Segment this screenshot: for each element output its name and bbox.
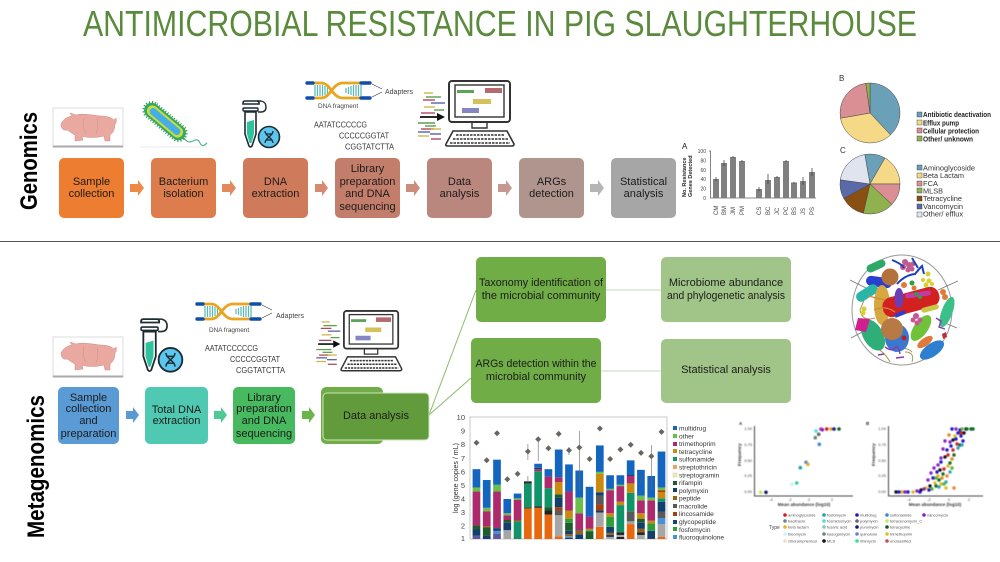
bar chart: resistance genes detected [682,142,816,215]
legend C: Tetracycline [923,194,962,203]
arrow [222,180,236,196]
scatter legend: quinolone [860,532,878,536]
step: bacterium isolation [151,158,216,218]
bar chart: resistance genes detected: PC [784,206,790,215]
box: microbiome abundance [661,257,791,322]
arrow [130,180,144,196]
icon: computer with reads [418,81,514,146]
step: data analysis [321,387,429,444]
legend: peptide [679,496,701,503]
legend [673,426,724,542]
step: library preparation: and DNA [242,415,287,427]
legend: tetracycline [679,449,713,456]
scatter chart A: -2 [788,497,793,502]
bar chart: resistance genes detected: JC [775,207,781,215]
legend C: MLSB [923,186,943,196]
legend: other [679,433,695,440]
step: ARGs detection: ARGs [537,176,567,188]
scatter legend: unclassified [890,538,911,544]
step: library preparation: and DNA [345,188,390,200]
scatter chart A: 0.50 [744,458,753,463]
step: total DNA extraction [145,387,208,444]
scatter chart B: B [866,421,870,426]
scatter chart A: 2 [831,497,834,502]
step: sample collection: collection [69,188,114,200]
scatter chart A: 0 [808,497,811,502]
box: taxonomy identification: the microbial community [482,290,601,302]
scatter legend: MLS [827,538,836,544]
legend B: Other/ unknown [923,134,973,144]
legend C: Other/ efflux [923,210,963,218]
panel: genomics [16,74,991,218]
connector lines [429,290,476,415]
scatter legend [769,512,948,544]
legend: multidrug [679,426,706,432]
scatter legend: multidrug [860,512,876,518]
bar chart: resistance genes detected: 60 [700,168,706,174]
bar chart: resistance genes detected: BM [722,206,728,215]
scatter chart B: 2 [968,497,971,502]
bar chart: resistance genes detected: PS [810,207,816,215]
scatter chart A: Mean abundance (log10) [778,502,831,507]
pie chart B: B [839,74,844,83]
scatter legend: kasugamycin [827,532,850,536]
step: library preparation: Library [247,392,281,404]
legend B [917,110,991,144]
scatter chart B: 0.25 [878,473,887,478]
y axis: 6 [461,468,465,476]
legend: glycopeptide [679,519,716,526]
legend C: Beta Lactam [923,171,964,180]
scatter chart B: 0 [948,497,951,502]
icon: pig card [53,337,123,377]
legend: streptogramin [679,472,720,479]
bars [473,445,665,539]
bar chart: resistance genes detected: JM [731,207,737,215]
scatter legend: aminoglycoside [788,512,816,518]
y axis: 10 [457,413,465,422]
icon: DNA fragment: Adapters [385,89,414,96]
sequence reads text: CCCCCGGTAT [339,132,389,140]
sequence reads text: AATATCCCCCG [314,120,367,130]
legend: polymyxin [679,488,709,495]
icon: computer with reads [316,311,402,371]
step: library preparation [233,387,295,444]
icon: DNA fragment: Adapters [276,313,305,320]
divider [0,240,1000,242]
y axis: 7 [461,454,465,463]
sequence reads text: AATATCCCCCG [205,344,258,353]
bar chart: resistance genes detected: 80 [700,158,706,164]
bar chart: resistance genes detected: 100 [698,149,706,155]
step: data analysis: analysis [440,188,480,200]
legend C: Aminoglycoside [923,164,975,172]
box: statistical analysis [661,339,791,403]
bar chart: resistance genes detected: 20 [700,186,706,192]
step: sample collection and preparation [58,387,119,444]
step: sample collection: Sample [73,176,110,188]
bar chart: resistance genes detected: BS [792,207,798,215]
box: taxonomy identification [476,257,606,322]
step: sample collection and preparation: collection [66,403,111,415]
y axis: 8 [461,440,465,449]
step: library preparation [335,158,400,218]
step: data analysis: Data [448,176,472,188]
legend C [917,164,975,218]
arrow [302,407,315,423]
legend: sulfonamide [679,457,715,464]
bar chart: resistance genes detected: 40 [700,177,706,183]
bar chart: resistance genes detected: 0 [703,196,706,202]
scatter chart A: 1.00 [744,426,753,431]
bar chart: resistance genes detected: BC [766,206,772,215]
scatter chart B: -2 [927,497,932,502]
step: sample collection and preparation: Sample [70,392,107,404]
scatter chart B: 1.00 [878,426,887,431]
step: sample collection and preparation: and [79,415,98,427]
scatter chart A: Frequency [737,443,742,466]
step: bacterium isolation: Bacterium [159,176,208,188]
scatter legend: vancomycin [927,512,948,518]
diamonds and error bars [474,426,664,490]
step: data analysis [427,158,492,218]
step: ARGs detection: detection [529,188,574,200]
arrow [315,180,328,196]
step: total DNA extraction: Total DNA [152,404,202,416]
stacked bar chart: log (gene copies / mL) [451,443,460,513]
connector [606,289,661,291]
scatter chart B: Frequency [871,443,876,466]
scatter chart A: A [739,421,743,426]
y axis: 2 [461,522,465,530]
step: bacterium isolation: isolation [163,188,204,200]
scatter legend: bacitracin [788,518,805,524]
sequence reads text: CCCCCGGTAT [230,355,280,364]
step: DNA extraction: DNA [264,176,288,188]
sequence reads text: CGGTATCTTA [236,366,286,375]
step: library preparation: Library [351,163,385,175]
scatter legend: trimethoprim [890,532,913,536]
arrow [406,180,420,196]
scatter chart A [737,421,853,507]
step: statistical analysis: Statistical [620,176,667,188]
scatter chart A: -4 [769,497,774,502]
arrow [590,180,604,196]
y axis [457,413,465,543]
scatter legend: beta lactam [788,524,809,530]
scatter chart B: 0.75 [878,442,887,447]
box: ARGs detection: microbial community [486,371,587,383]
scatter legend: Type [769,525,780,531]
scatter chart B: 0.50 [878,458,887,463]
legend: streptothricin [679,464,717,472]
scatter chart A: 0.75 [744,442,753,447]
sequence reads text [205,344,286,375]
legend: fluoroquinolone [679,535,724,542]
y axis: 9 [461,426,465,436]
stacked bar chart [451,413,724,543]
heading: Genomics: Genomics [16,112,43,210]
bar chart: resistance genes detected: CS [757,207,763,215]
bar chart: resistance genes detected: CM [714,206,720,215]
legend: trimethoprim [679,441,716,448]
scatter legend: puromycin [860,524,878,530]
legend B: Antibiotic deactivation [923,110,991,119]
icon: bacterium [140,100,207,147]
step: statistical analysis [611,158,676,218]
legend: fosfomycin [679,527,711,534]
step: total DNA extraction: extraction [153,415,200,427]
bar chart: resistance genes detected: A [682,142,688,151]
panel: metagenomics [23,255,983,544]
icon: DNA tube [141,319,182,372]
step: sample collection and preparation: preparation [61,428,116,440]
step: library preparation: sequencing [339,201,396,213]
heading: Metagenomics: Metagenomics [23,395,50,538]
scatter chart B: 0.00 [878,489,887,494]
arrow [214,407,227,423]
scatter legend: chloramphenicol [788,538,817,544]
legend: rifampin [679,480,703,487]
legend: macrolide [679,503,708,510]
scatter legend: rifamycin [860,538,876,544]
legend C: Vancomycin [923,202,963,211]
arrow [126,407,139,423]
y axis: 1 [461,534,465,543]
box: statistical analysis: Statistical analysis [681,364,771,376]
bar chart: resistance genes detected: JS [801,208,807,215]
box: taxonomy identification: Taxonomy identification of [479,277,604,289]
step: library preparation: sequencing [236,428,292,440]
icon: pig card [53,108,123,147]
arrow [498,180,512,196]
icon: DNA fragment [197,304,305,334]
pie chart C: C [840,146,846,155]
step: sample collection [59,158,124,218]
legend C: FCA [923,179,938,188]
icon: DNA fragment [307,83,414,110]
box: ARGs detection: ARGs detection within the [476,358,596,370]
scatter chart A: 0.25 [744,473,753,478]
box: microbiome abundance: Microbiome abundance [669,277,783,289]
legend B: Efflux pump [923,118,959,128]
connector [601,370,661,372]
box: microbiome abundance: and phylogenetic analysis [667,290,785,302]
scatter chart B [866,421,983,507]
box: ARGs detection [471,338,601,403]
scatter chart B: Mean abundance (log10) [909,502,962,507]
step: ARGs detection [519,158,584,218]
scatter chart A: 0.00 [744,489,753,494]
bar chart: resistance genes detected: Genes Detected [688,155,694,197]
scatter chart B: -4 [907,497,912,502]
sequence reads text [314,120,395,152]
scatter legend: fusaric acid [827,524,847,530]
step: data analysis: Data analysis [343,410,410,422]
legend: lincosamide [679,511,714,518]
step: statistical analysis: analysis [624,188,664,200]
scatter legend: tetracycline [890,524,911,530]
y axis: 4 [461,494,465,504]
pie chart C [840,146,900,214]
pie chart B [839,74,900,143]
y axis: 3 [461,508,465,517]
scatter legend: tetracenomycin_C [890,518,922,524]
scatter legend: fosfomycin [827,512,846,518]
scatter legend: polymyxin [860,518,878,524]
bar chart: resistance genes detected: PM [740,206,746,215]
step: DNA extraction [243,158,308,218]
step: library preparation: preparation [236,403,292,415]
illustration: microbial community sphere [850,255,958,365]
bar chart: resistance genes detected: No. Resistance [682,158,688,197]
step: DNA extraction: extraction [252,188,299,200]
icon: DNA tube [243,101,280,148]
legend B: Cellular protection [923,126,979,136]
step: library preparation: preparation [340,176,395,188]
y axis: 5 [461,481,465,490]
scatter legend: fosmidomycin [827,518,851,524]
icon: DNA fragment: DNA fragment [209,327,249,334]
scatter legend: bleomycin [788,532,806,536]
scatter legend: sulfonamide [890,512,912,518]
sequence reads text: CGGTATCTTA [345,142,395,152]
icon: DNA fragment: DNA fragment [318,103,358,110]
